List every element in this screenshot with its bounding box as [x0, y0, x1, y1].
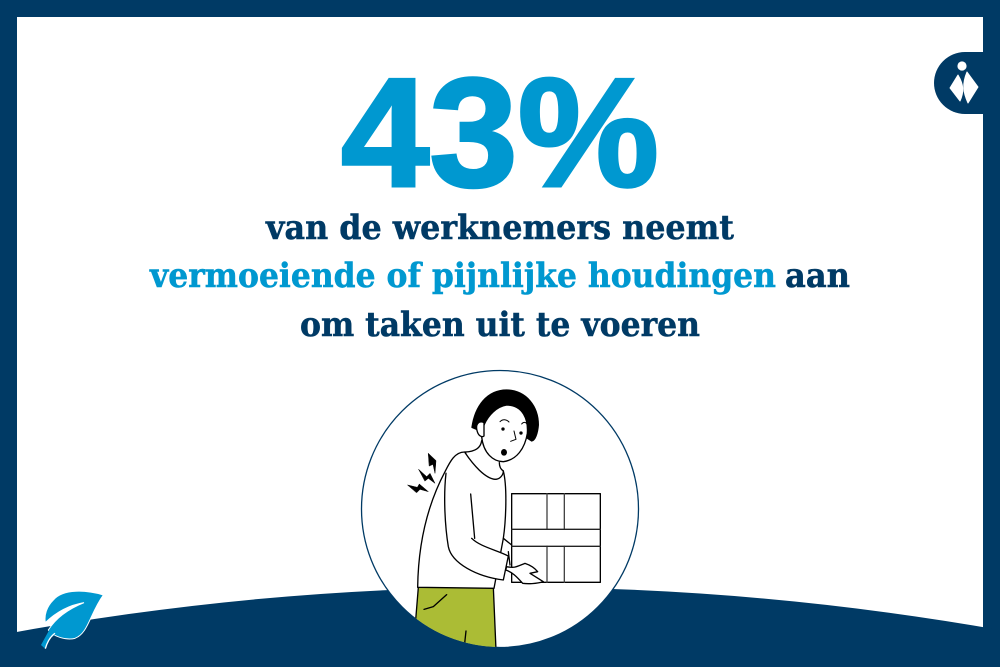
icon: leaf	[41, 591, 103, 649]
line 3: om taken uit te voeren	[300, 305, 700, 345]
illustration circle	[362, 370, 638, 648]
hair	[472, 390, 538, 441]
pain bolts	[408, 453, 436, 493]
text block: statement	[149, 208, 850, 345]
hand and far arm	[503, 538, 543, 584]
trousers	[416, 587, 496, 650]
box	[512, 494, 600, 582]
line 1: van de werknemers neemt	[265, 208, 734, 248]
face	[465, 405, 527, 471]
illustration: person lifting a box with back pain	[408, 390, 600, 650]
heading: 43%: 43%	[341, 46, 659, 219]
line 2 highlighted: vermoeiende of pijnlijke houdingen	[149, 256, 776, 296]
line 2 end: aan	[785, 256, 850, 296]
icon: logo top right	[934, 52, 983, 114]
body and arm	[418, 452, 508, 588]
